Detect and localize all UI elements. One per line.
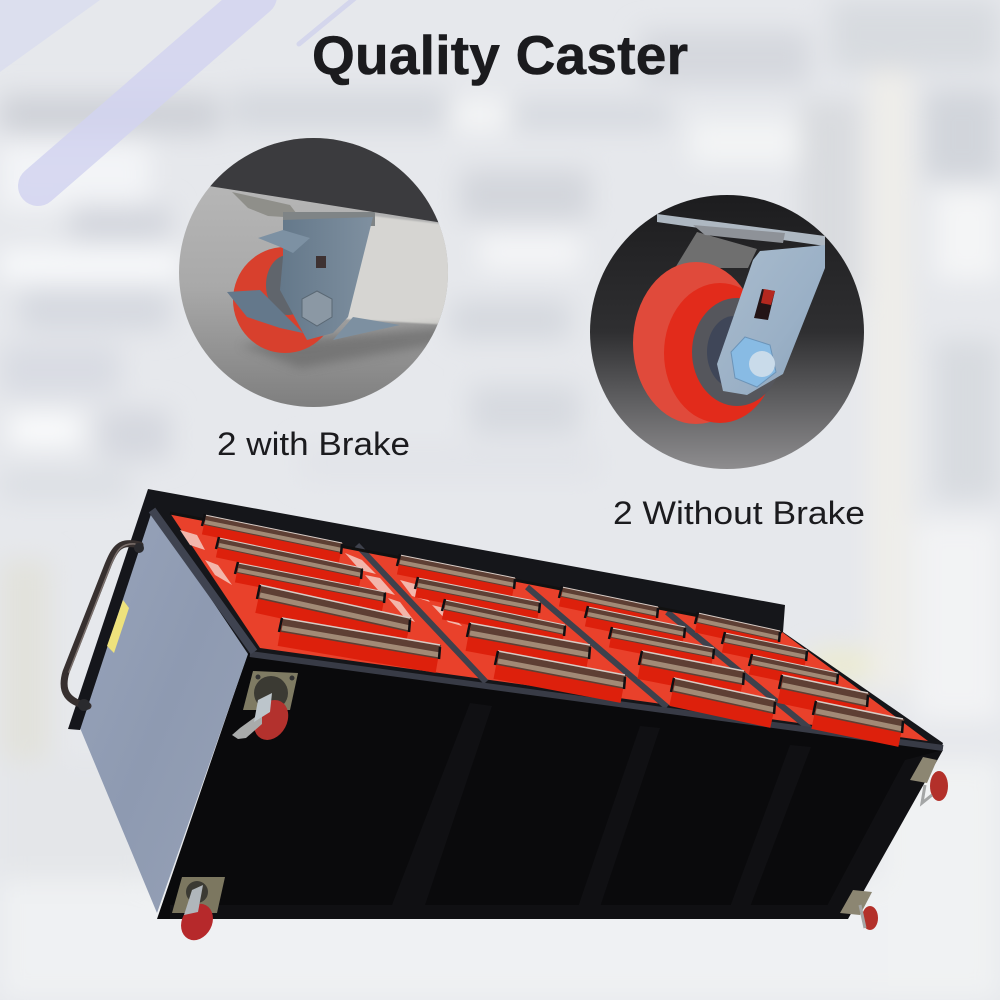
yellow warning label <box>107 600 129 653</box>
brake top tab <box>258 230 310 253</box>
fork bracket <box>280 217 373 340</box>
caster: front left with brake <box>232 671 298 746</box>
left edge rim <box>68 489 154 730</box>
red wheel <box>233 247 324 353</box>
red wheel tread <box>633 262 743 424</box>
caster: rear left <box>172 877 225 946</box>
bolt end <box>749 351 775 377</box>
handle rails and troughs <box>203 515 903 739</box>
swivel race <box>283 212 375 226</box>
axle bolt <box>302 291 332 326</box>
fork slot <box>754 289 775 320</box>
label: 2 with brake: 2 with Brake <box>217 426 410 462</box>
top face seam <box>170 513 782 632</box>
fork slot <box>316 256 326 268</box>
hub ring <box>707 316 734 384</box>
light wall behind caster <box>345 215 450 325</box>
wheel hub <box>692 298 782 406</box>
side grab handle <box>64 543 144 711</box>
front fork <box>717 245 825 395</box>
interior dividers <box>170 703 943 919</box>
floor shadow <box>240 326 450 368</box>
caster: front right <box>910 757 948 803</box>
photo: caster without brake <box>588 193 866 471</box>
top face frame and rear rim <box>148 489 943 752</box>
gear mounting strip <box>232 192 296 217</box>
rear fork <box>675 232 757 268</box>
brake foot <box>333 317 400 340</box>
brake lever <box>227 290 303 333</box>
side rim <box>152 510 254 652</box>
mounting plate <box>657 214 825 246</box>
panel highlights <box>180 530 462 626</box>
handle end caps <box>202 514 903 733</box>
dark cart underside <box>210 138 438 222</box>
red panels <box>170 513 928 741</box>
title: Quality Caster <box>312 24 688 86</box>
decorative diagonal lavender stripes <box>0 0 355 186</box>
left side panel <box>80 508 248 913</box>
front rim <box>250 654 943 748</box>
red wheel face <box>664 283 776 423</box>
label: 2 without brake: 2 Without Brake <box>613 495 865 531</box>
hex bolt <box>731 337 776 387</box>
rolling cart <box>64 489 948 946</box>
photo: caster with brake <box>178 137 450 409</box>
panel dividers <box>357 545 810 729</box>
caster: rear right <box>840 890 878 930</box>
slot red glimpse <box>761 289 775 305</box>
wheel hub <box>266 256 293 315</box>
lower plate <box>693 225 785 243</box>
black open underside <box>157 653 943 919</box>
